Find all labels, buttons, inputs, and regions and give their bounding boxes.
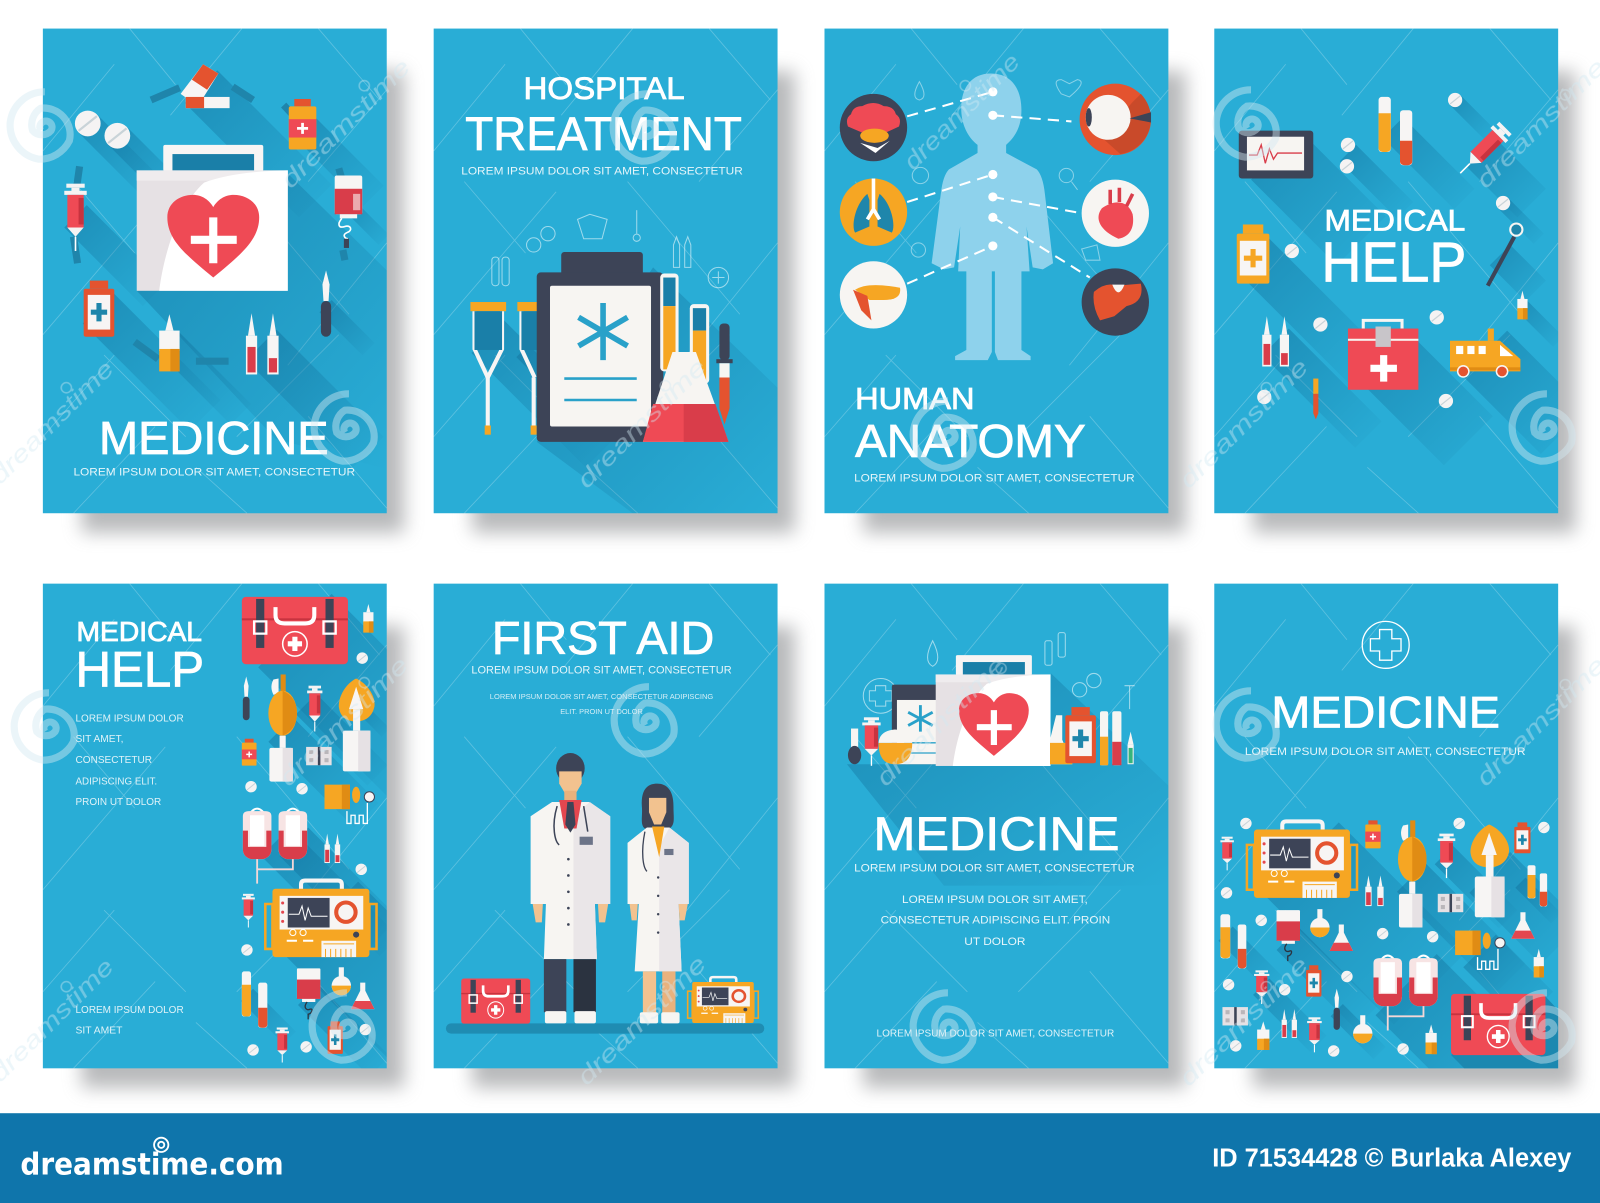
icon: syringe bbox=[276, 1027, 289, 1063]
watermark: dreamstime spirals and text: dreamstime bbox=[898, 48, 1026, 176]
icon: flasks bbox=[332, 967, 374, 1009]
icon: tonometer bbox=[1455, 931, 1505, 969]
watermark: dreamstime spirals and text: dreamstime bbox=[1174, 952, 1314, 1092]
body text: LOREM IPSUM DOLOR bbox=[76, 713, 184, 724]
body text: CONSECTETUR bbox=[76, 755, 152, 766]
outline icons bbox=[911, 80, 1100, 260]
icon: bottle bbox=[328, 1021, 343, 1054]
title: MEDICINE bbox=[1271, 687, 1500, 738]
icon: dropper bbox=[848, 729, 861, 764]
panel: first aid card bbox=[434, 584, 778, 1068]
icon: bottle bbox=[242, 739, 257, 766]
icon: pill packs bbox=[1222, 894, 1463, 1025]
body text: SIT AMET, bbox=[76, 734, 123, 745]
icon: ampoules bbox=[246, 313, 279, 374]
watermark: dreamstime spirals and text: dreamstime bbox=[871, 652, 1011, 792]
panel: medicine kit card bbox=[43, 29, 389, 513]
footer credit: ID 71534428 © Burlaka Alexey bbox=[1212, 1144, 1572, 1172]
panel: medicine icons grid card bbox=[1214, 584, 1558, 1068]
icon: pill pack bbox=[306, 747, 332, 765]
icon: heart organ bbox=[1082, 180, 1149, 247]
watermark: dreamstime spirals and text: dreamstime bbox=[276, 54, 416, 194]
watermark: dreamstime spirals and text: dreamstime bbox=[572, 951, 712, 1091]
icon: droppers bbox=[1257, 949, 1544, 1054]
body text: LOREM IPSUM DOLOR SIT AMET, CONSECTETUR ADIPISCING bbox=[490, 692, 713, 701]
icon: ambu bag bbox=[1398, 820, 1427, 928]
body text: CONSECTETUR ADIPISCING ELIT. PROIN bbox=[881, 914, 1110, 926]
icon: test tubes bbox=[660, 273, 709, 384]
icon: first aid kit bbox=[936, 655, 1050, 766]
title: MEDICINE bbox=[99, 412, 329, 464]
footer text: LOREM IPSUM DOLOR SIT AMET, CONSECTETUR bbox=[877, 1029, 1114, 1040]
icon: defibrillator bbox=[265, 881, 377, 957]
icon: test tubes bbox=[1379, 97, 1412, 165]
title: FIRST AID bbox=[492, 612, 714, 664]
panel: human anatomy card bbox=[824, 29, 1168, 513]
icon: liver bbox=[1082, 268, 1149, 336]
icon: pipette bbox=[716, 323, 733, 424]
title: human: HUMAN bbox=[855, 382, 974, 416]
icon: teal cross bottle bbox=[84, 281, 114, 337]
icon: thin dropper bbox=[1313, 379, 1318, 419]
dotted connector lines bbox=[907, 87, 1090, 284]
body text bbox=[76, 713, 184, 808]
floor bbox=[446, 1023, 764, 1034]
icon: iv bag bbox=[1277, 910, 1300, 961]
icon: round flask bbox=[879, 730, 912, 764]
icon: ambu bag bbox=[268, 674, 297, 782]
icon: red kit bbox=[461, 979, 530, 1024]
icon: syringe bbox=[64, 184, 87, 251]
icon: capsules bbox=[181, 64, 230, 108]
title: medical: MEDICAL bbox=[1324, 205, 1465, 238]
icon: pills bbox=[75, 111, 130, 149]
icon: ambulance bbox=[1450, 329, 1520, 377]
icon: pancreas bbox=[840, 261, 907, 329]
icon: dropper bbox=[363, 604, 373, 633]
panel: hospital treatment card bbox=[434, 29, 778, 513]
panel: medical help list card bbox=[42, 584, 387, 1068]
icon: blood bags bbox=[243, 809, 307, 884]
long shadow bbox=[847, 673, 1168, 886]
figure: male doctor bbox=[531, 753, 610, 1023]
figure: female doctor bbox=[628, 784, 689, 1023]
icon: blood bags bbox=[1373, 956, 1438, 1031]
subtitle: LOREM IPSUM DOLOR SIT AMET, CONSECTETUR bbox=[1245, 746, 1526, 758]
icon: bottle bbox=[1237, 224, 1269, 284]
icon: ampoules bbox=[324, 834, 340, 863]
icon: test tubes bbox=[1100, 711, 1121, 765]
icon: dropper bbox=[159, 314, 180, 371]
icon: small dropper bbox=[1517, 291, 1528, 319]
subtitle: LOREM IPSUM DOLOR SIT AMET, CONSECTETUR bbox=[471, 664, 732, 676]
watermark: dreamstime spirals and text: dreamstime bbox=[1471, 652, 1600, 792]
body text bbox=[881, 894, 1110, 948]
title: medical: MEDICAL bbox=[77, 616, 202, 647]
panel: medical help card bbox=[1214, 29, 1586, 513]
icon: crutches bbox=[470, 302, 538, 435]
icon: flasks bbox=[1310, 909, 1535, 1043]
subtitle: LOREM IPSUM DOLOR SIT AMET, CONSECTETUR bbox=[854, 862, 1135, 874]
body text: lower: SIT AMET bbox=[76, 1026, 123, 1037]
icon: defibrillator bbox=[1247, 821, 1357, 898]
subtitle: LOREM IPSUM DOLOR SIT AMET, CONSECTETUR bbox=[73, 466, 355, 478]
icon: syringe bbox=[242, 894, 255, 928]
title: hospital: HOSPITAL bbox=[523, 70, 685, 106]
outline icons bbox=[863, 633, 1135, 713]
icon: eye bbox=[1080, 84, 1151, 155]
footer logo text: dreamstime.com bbox=[20, 1147, 284, 1182]
icon: flask bbox=[643, 352, 729, 442]
icon: syringe bbox=[307, 686, 322, 731]
title: treatment: TREATMENT bbox=[465, 108, 742, 160]
panel: medicine kit banner card bbox=[824, 584, 1168, 1068]
body text: ADIPISCING ELIT. bbox=[76, 777, 157, 788]
icon: dental mirror bbox=[1488, 223, 1522, 286]
icon: defibrillator bbox=[688, 977, 758, 1023]
icon: iv bag bbox=[297, 968, 320, 1019]
body text: ELIT. PROIN UT DOLOR bbox=[560, 707, 643, 716]
icon: pills bbox=[241, 652, 371, 1056]
watermark: dreamstime spirals and text: dreamstime bbox=[1174, 354, 1314, 494]
icon: oxygen mask bbox=[339, 679, 375, 771]
icon: syringe bbox=[1453, 120, 1513, 181]
icon: red kit bbox=[1348, 320, 1418, 390]
icon: teal cross bottle bbox=[1065, 707, 1096, 763]
outline icons bbox=[492, 210, 729, 288]
icon: red kit bbox=[242, 597, 348, 664]
icon: scalpel bbox=[321, 270, 331, 337]
subtitle: LOREM IPSUM DOLOR SIT AMET, CONSECTETUR bbox=[461, 165, 743, 177]
body text: lower: LOREM IPSUM DOLOR bbox=[76, 1005, 184, 1016]
icon: ampoules bbox=[1282, 875, 1384, 1038]
icon: syringes bbox=[1220, 834, 1455, 1052]
body text: PROIN UT DOLOR bbox=[76, 797, 161, 808]
icon: monitor bbox=[1239, 131, 1313, 179]
title: MEDICINE bbox=[873, 808, 1119, 860]
title: help: HELP bbox=[76, 642, 204, 698]
icon: pills bbox=[1221, 818, 1550, 1057]
title: help: HELP bbox=[1321, 231, 1466, 294]
icon: scalpel bbox=[1334, 989, 1340, 1030]
icon: bottles bbox=[1306, 820, 1531, 997]
body text: LOREM IPSUM DOLOR SIT AMET, bbox=[902, 894, 1088, 906]
body text: UT DOLOR bbox=[964, 936, 1026, 948]
body text: lower bbox=[76, 1005, 184, 1037]
footer bar bbox=[0, 1113, 1600, 1203]
icon: right flask bbox=[1050, 715, 1072, 764]
icon: test tubes bbox=[1220, 865, 1547, 969]
icon: tonometer bbox=[324, 785, 374, 823]
icon: cross in circle bbox=[1362, 621, 1409, 668]
body text bbox=[490, 692, 713, 716]
icon: ampoules bbox=[1262, 316, 1289, 367]
watermark: dreamstime spirals and text: dreamstime bbox=[1471, 54, 1600, 194]
footer logo spiral bbox=[154, 1138, 168, 1152]
icon: red kit bbox=[1451, 994, 1545, 1055]
icon: scalpel bbox=[243, 676, 250, 720]
icon: green ampoule bbox=[1128, 732, 1134, 764]
icon: lungs bbox=[840, 179, 907, 246]
watermark: dreamstime spirals and text: dreamstime bbox=[274, 652, 414, 792]
title: anatomy: ANATOMY bbox=[855, 415, 1086, 467]
icon: first aid kit with heart bbox=[137, 145, 288, 291]
icon: brain bbox=[840, 94, 907, 161]
watermark: dreamstime spirals and text: dreamstime bbox=[572, 354, 712, 494]
icon: oxygen mask bbox=[1470, 824, 1509, 917]
icon: orange bottle bbox=[289, 99, 316, 149]
icon: clipboard bbox=[537, 252, 663, 442]
icon: syringe bbox=[862, 717, 881, 766]
icon: pills bbox=[1257, 93, 1510, 408]
subtitle: LOREM IPSUM DOLOR SIT AMET, CONSECTETUR bbox=[854, 473, 1135, 485]
icon: clipboard bbox=[892, 685, 939, 764]
icon: iv bag bbox=[335, 176, 362, 248]
icon: test tubes bbox=[242, 971, 267, 1028]
human body silhouette bbox=[932, 73, 1053, 360]
